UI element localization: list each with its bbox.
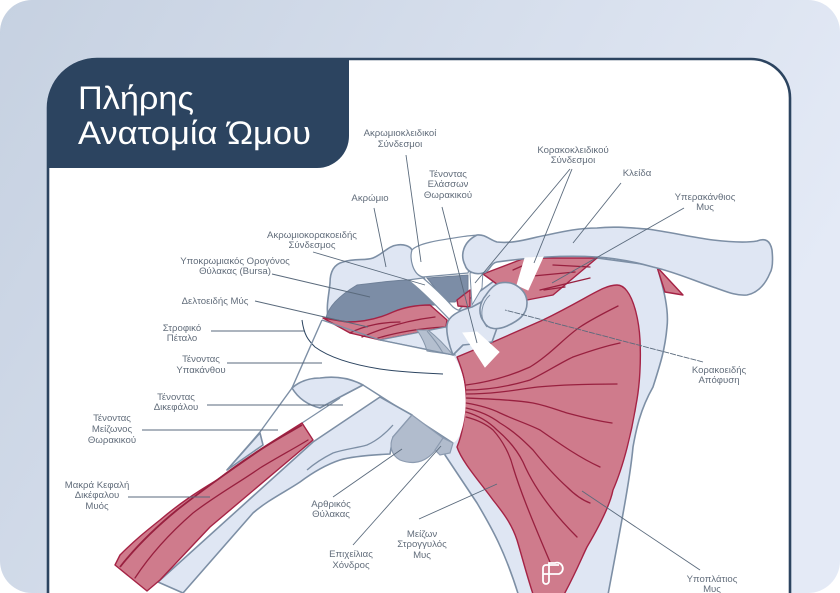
coracoacromial ligament [408, 278, 467, 320]
label: Κορακοειδής Απόφυση: Απόφυση [698, 375, 740, 386]
label: Επιχείλιας Χόνδρος: Επιχείλιας [329, 549, 373, 560]
label: Τένοντας Υπακάνθου: Υπακάνθου [176, 365, 226, 376]
pale sliver beside tendon [227, 433, 263, 470]
title: Ανατομία Ώμου [78, 115, 311, 151]
long head of biceps [115, 423, 313, 591]
label: Ακρωμιοκλειδικοί Σύνδεσμοι [364, 128, 437, 262]
label: Ακρωμιοκορακοειδής Σύνδεσμος: Σύνδεσμος [288, 240, 336, 251]
label: Μακρά Κεφαλή Δικέφαλου Μυός: Μακρά Κεφαλή [65, 480, 129, 491]
subscapularis muscle [457, 285, 640, 593]
acromion end of clavicle joint [411, 235, 478, 277]
label: Τένοντας Μείζωνος Θωρακικού [88, 413, 278, 446]
label: Ακρωμιοκορακοειδής Σύνδεσμος [267, 230, 425, 285]
label: Μείζων Στρογγυλός Μυς [397, 484, 497, 561]
label: Τένοντας Ελάσσων Θωρακικού: Ελάσσων [428, 179, 469, 190]
label: Ακρωμιοκορακοειδής Σύνδεσμος: Ακρωμιοκορακοειδής [267, 230, 357, 241]
label: Επιχείλιας Χόνδρος: Χόνδρος [332, 560, 370, 571]
humerus shaft [158, 397, 412, 593]
label: Τένοντας Μείζωνος Θωρακικού: Θωρακικού [88, 435, 136, 446]
label: Υποπλάτιος Μυς [582, 491, 738, 593]
label: Μείζων Στρογγυλός Μυς: Μείζων [407, 529, 437, 540]
red muscle fragment [457, 290, 470, 307]
label: Ακρώμιο [351, 193, 389, 267]
humerus outline [227, 320, 322, 470]
label: Δελτοειδής Μύς [182, 296, 368, 327]
label: Υποκρωμιακός Ορογόνος Θύλακας (Bursa) [180, 256, 370, 297]
label: Μακρά Κεφαλή Δικέφαλου Μυός: Μυός [85, 501, 109, 512]
label: Κλείδα [573, 168, 652, 243]
trapezoid ligament [517, 257, 543, 290]
clavicle [463, 227, 773, 295]
label: Επιχείλιας Χόνδρος [329, 446, 441, 571]
label: Αρθρικός Θύλακας: Θύλακας [312, 509, 350, 520]
subacromial bursa [326, 275, 468, 322]
line along the humeral head [322, 320, 453, 355]
label: Κλείδα: Κλείδα [623, 168, 652, 179]
capsule under acromion [380, 327, 455, 355]
bicipital groove line [363, 385, 453, 443]
label: Ακρωμιοκλειδικοί Σύνδεσμοι: Ακρωμιοκλειδικοί [364, 128, 437, 139]
rotator cuff curve [302, 320, 443, 374]
label: Υποπλάτιος Μυς: Υποπλάτιος [687, 574, 738, 585]
conoid ligament [470, 270, 483, 305]
label: Στροφικό Πέταλο: Στροφικό [163, 323, 201, 334]
shoulder anatomy illustration [115, 227, 773, 593]
label: Ακρωμιοκλειδικοί Σύνδεσμοι: Σύνδεσμοι [378, 139, 422, 150]
title: Πλήρης [78, 80, 194, 116]
glenoid labrum [435, 438, 453, 455]
label: Κορακοειδής Απόφυση: Κορακοειδής [692, 365, 747, 376]
supraspinatus triangle [657, 267, 683, 295]
label: Τένοντας Μείζωνος Θωρακικού: Τένοντας [93, 413, 131, 424]
humeral head [322, 319, 466, 443]
label: Στροφικό Πέταλο [163, 323, 304, 344]
label: Δελτοειδής Μύς: Δελτοειδής Μύς [182, 296, 249, 307]
label: Υπερακάνθιος Μυς: Υπερακάνθιος [675, 192, 736, 203]
supraspinatus muscle [483, 258, 597, 300]
label: Αρθρικός Θύλακας [311, 449, 402, 520]
label: Κορακοειδής Απόφυση [505, 310, 747, 386]
label: Κορακοκλειδικού Σύνδεσμοι: Σύνδεσμοι [551, 155, 595, 166]
label: Τένοντας Υπακάνθου: Τένοντας [182, 354, 220, 365]
label: Υπερακάνθιος Μυς [552, 192, 736, 283]
label: Υπερακάνθιος Μυς: Μυς [696, 202, 714, 213]
joint capsule [391, 415, 443, 462]
label: Κορακοκλειδικού Σύνδεσμοι [475, 145, 609, 283]
label: Τένοντας Υπακάνθου [176, 354, 322, 376]
label: Τένοντας Μείζωνος Θωρακικού: Μείζωνος [92, 424, 132, 435]
scapula [440, 258, 667, 593]
label: Μείζων Στρογγυλός Μυς: Μυς [413, 550, 431, 561]
logo [543, 563, 563, 584]
label: Μείζων Στρογγυλός Μυς: Στρογγυλός [397, 539, 447, 550]
label: Μακρά Κεφαλή Δικέφαλου Μυός [65, 480, 210, 512]
label: Μακρά Κεφαλή Δικέφαλου Μυός: Δικέφαλου [75, 490, 119, 501]
white panel [48, 59, 790, 593]
label: Τένοντας Δικεφάλου: Τένοντας [157, 392, 195, 403]
label: Τένοντας Δικεφάλου [154, 392, 343, 413]
label: Στροφικό Πέταλο: Πέταλο [167, 333, 197, 344]
label: Αρθρικός Θύλακας: Αρθρικός [311, 499, 351, 510]
label: Ακρώμιο: Ακρώμιο [351, 193, 389, 204]
coracoid base [447, 300, 497, 355]
pectoralis minor tendon [463, 332, 499, 367]
label: Υποκρωμιακός Ορογόνος Θύλακας (Bursa): Θύλακας (Bursa) [199, 266, 271, 277]
label: Υποκρωμιακός Ορογόνος Θύλακας (Bursa): Υποκρωμιακός Ορογόνος [180, 256, 290, 267]
label: Τένοντας Ελάσσων Θωρακικού: Θωρακικού [424, 190, 472, 201]
label: Τένοντας Ελάσσων Θωρακικού: Τένοντας [429, 169, 467, 180]
label: Κορακοκλειδικού Σύνδεσμοι: Κορακοκλειδικού [537, 145, 609, 156]
deltoid muscle [323, 305, 447, 340]
label: Τένοντας Ελάσσων Θωρακικού [424, 169, 477, 343]
acromion [327, 245, 425, 318]
label: Τένοντας Δικεφάλου: Δικεφάλου [154, 402, 198, 413]
greater tubercle [292, 377, 363, 408]
title block [47, 58, 349, 168]
coracoid process [480, 283, 527, 329]
